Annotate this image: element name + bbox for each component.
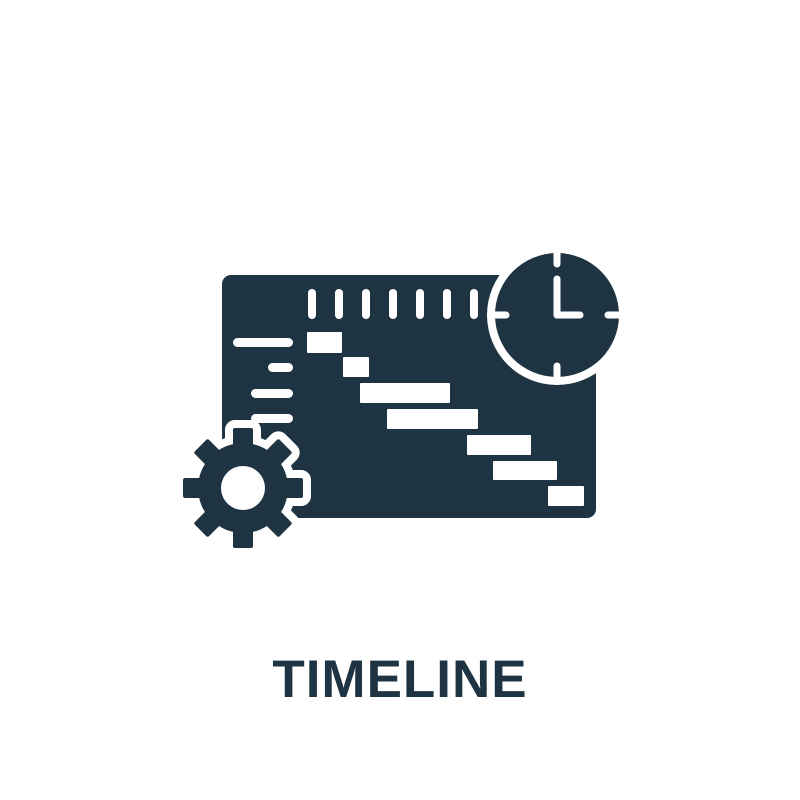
gantt bars xyxy=(307,332,584,506)
icon: gear xyxy=(183,428,303,548)
icon: clock xyxy=(487,245,627,385)
board panel xyxy=(222,275,596,518)
title: TIMELINE xyxy=(272,650,528,709)
left task lines xyxy=(233,338,293,423)
tick marks xyxy=(308,289,478,319)
